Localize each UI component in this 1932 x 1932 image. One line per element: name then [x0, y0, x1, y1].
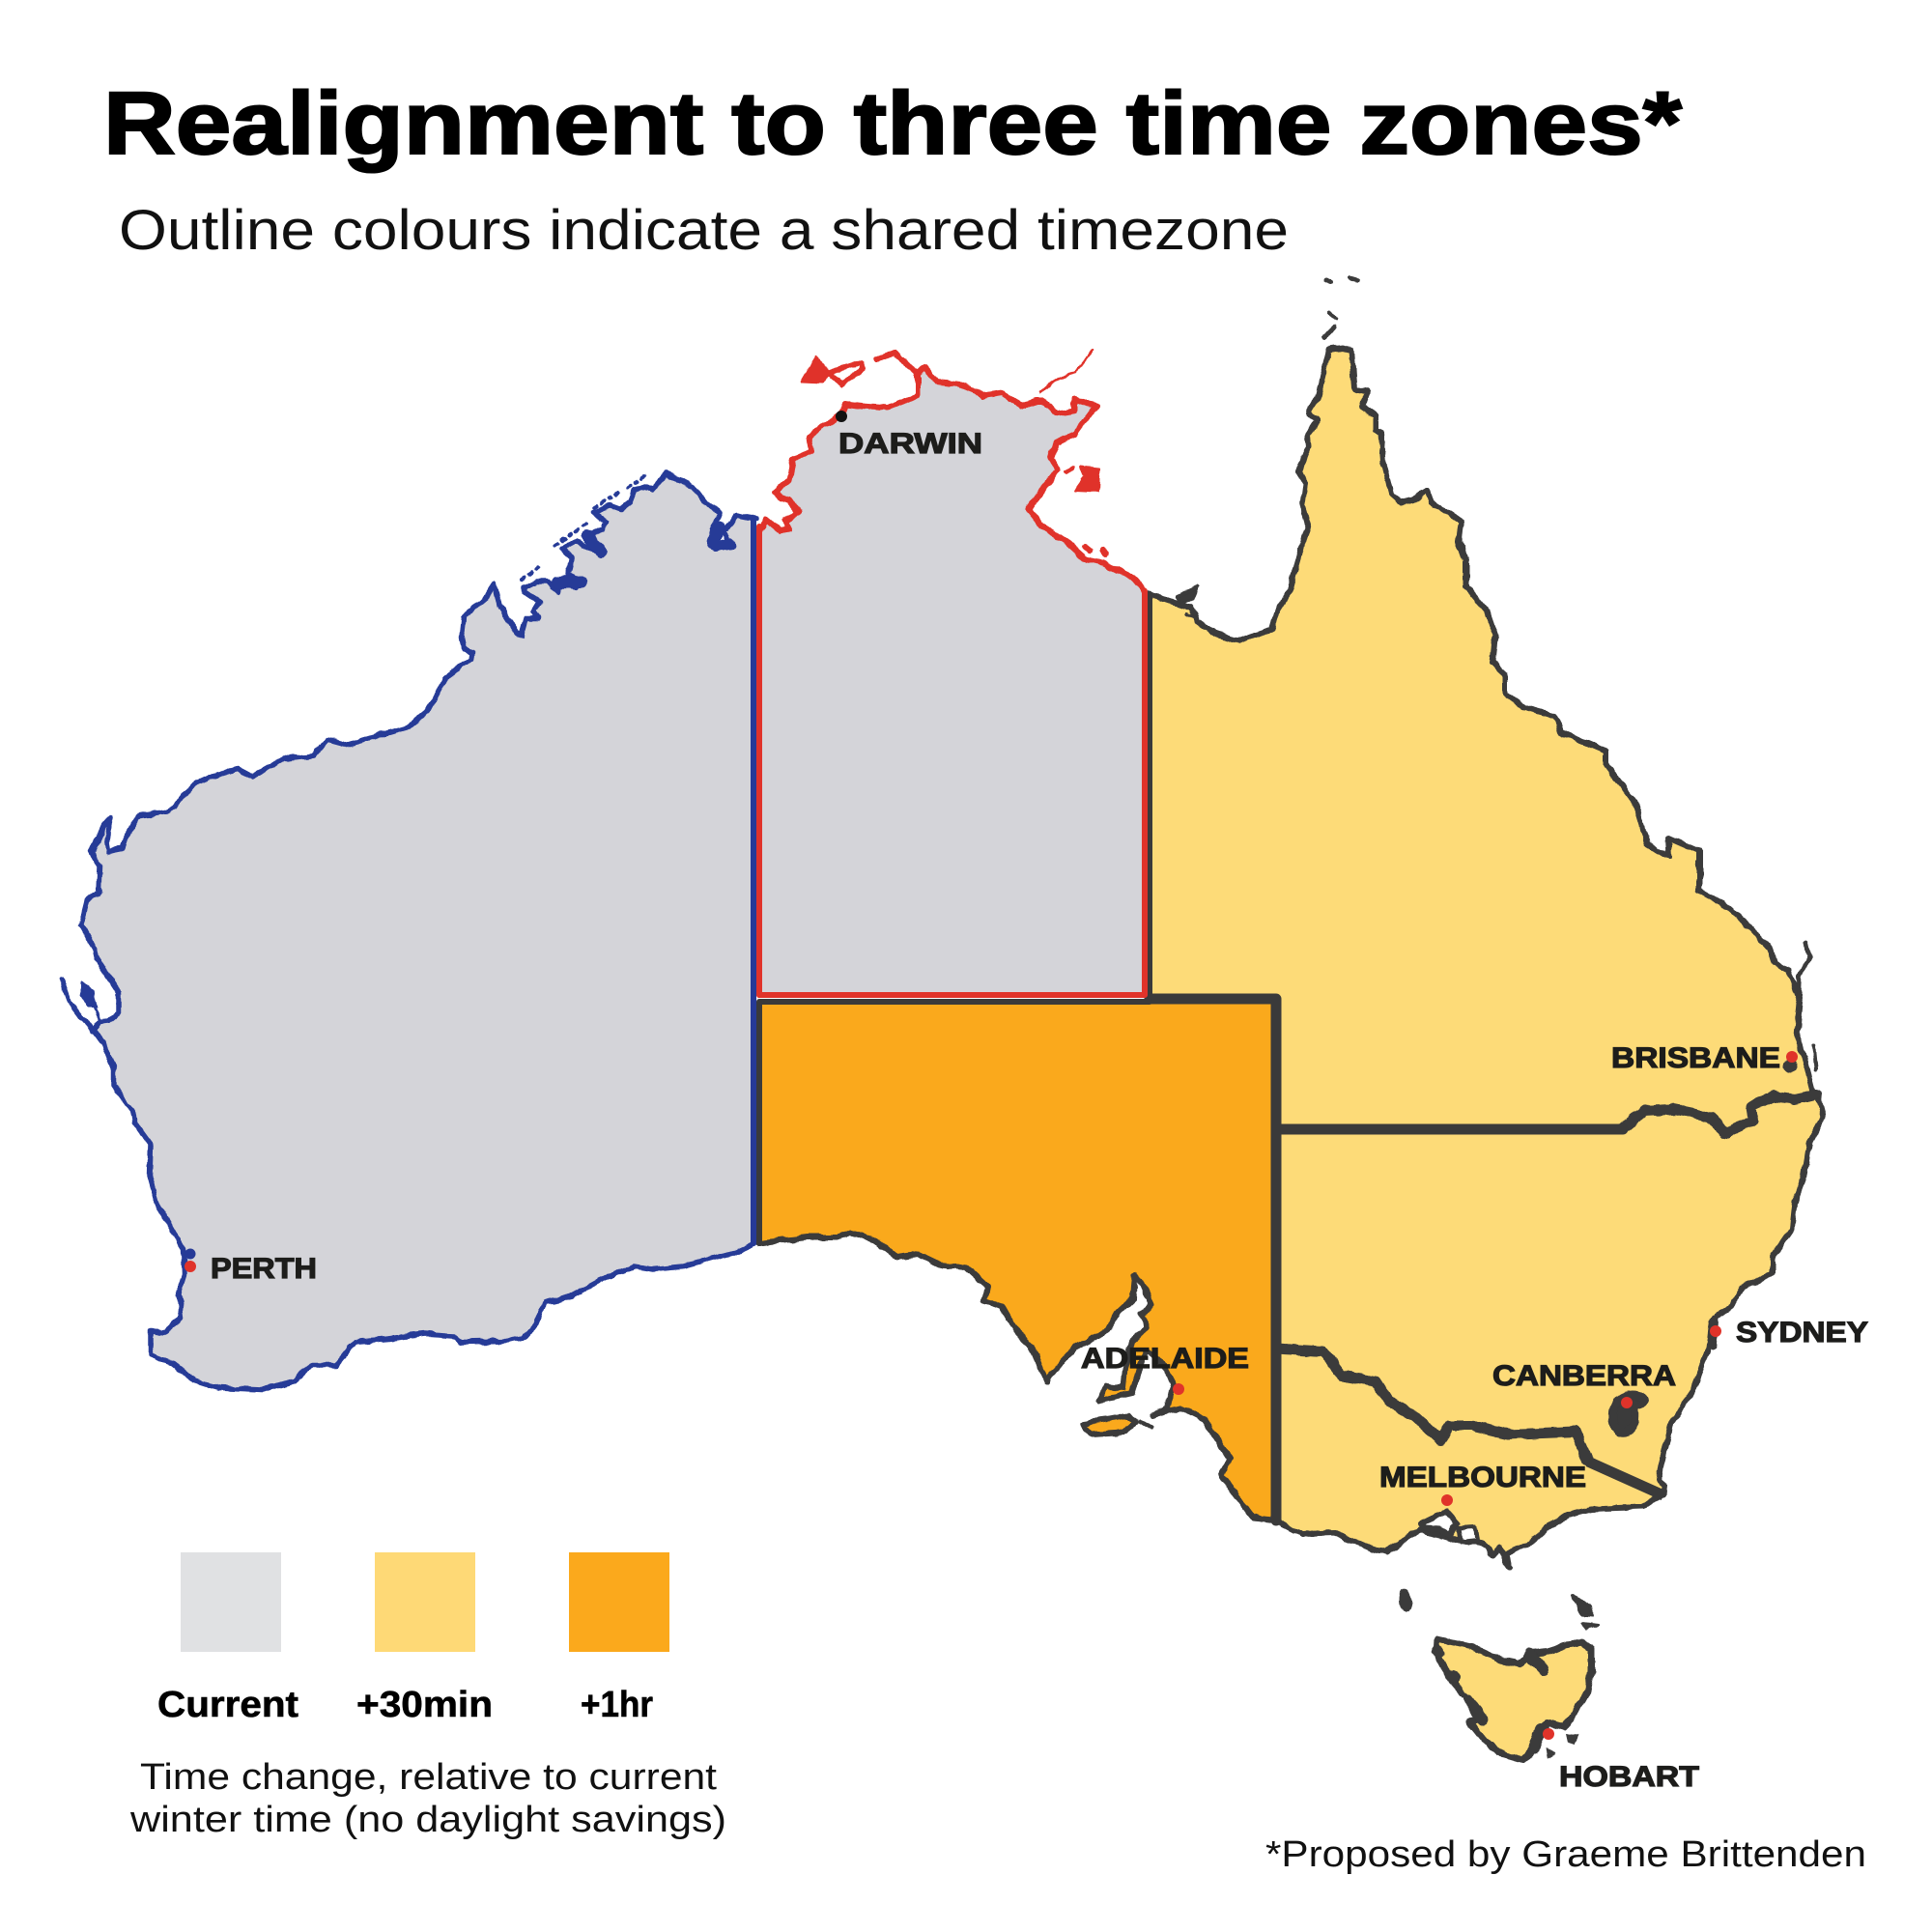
city markers [185, 411, 1798, 1740]
island: Flinders Island [1573, 1597, 1592, 1616]
island: King Island [1400, 1589, 1411, 1612]
border: NT east dark line [1147, 594, 1152, 999]
swatch: current [181, 1552, 281, 1652]
island: Pellew group [1067, 468, 1107, 555]
island: Groote Eylandt [1075, 467, 1099, 491]
marker: Darwin [836, 411, 847, 422]
label: Melbourne: MELBOURNE [1379, 1462, 1586, 1493]
label: Sydney: SYDNEY [1736, 1317, 1868, 1349]
label: Adelaide: ADELAIDE [1081, 1343, 1249, 1375]
fill: South Australia [759, 1002, 1276, 1520]
marker: Canberra [1621, 1397, 1633, 1408]
bay: Port Phillip [1420, 1511, 1458, 1535]
island: Cape Barren Island [1581, 1623, 1599, 1629]
legend caption: winter time (no daylight savings) [129, 1800, 726, 1840]
marker: Brisbane [1786, 1051, 1798, 1063]
marker: Perth [185, 1261, 196, 1272]
subtitle: Outline colours indicate a shared timezone [119, 199, 1289, 262]
legend label: current: Current [157, 1685, 298, 1725]
legend label: +1hr: +1hr [581, 1685, 653, 1725]
island: Fraser Island [1799, 944, 1809, 995]
border: SA west and north [759, 1002, 1150, 1241]
island: Melville east [826, 362, 863, 384]
border: eastern SA and QLD straight line [1150, 999, 1276, 1520]
border: NT south and east in red [759, 591, 1145, 995]
border: WA east [751, 519, 756, 1243]
label: Darwin: DARWIN [838, 428, 982, 460]
legend [129, 1552, 726, 1840]
outline: Dirk Hartog Island [61, 979, 92, 1031]
border: Queensland / New South Wales wiggly river section [1623, 1094, 1816, 1133]
island: Wessel Islands [1040, 351, 1092, 393]
specks: Kimberley offshore islands [522, 473, 649, 580]
swatch: +30min [375, 1552, 475, 1652]
border: Victoria east straight line [1588, 1462, 1663, 1495]
islet east of Kangaroo Island [1140, 1423, 1151, 1427]
marker: Melbourne [1441, 1494, 1453, 1506]
island: Moreton Bay islands [1814, 1046, 1816, 1069]
label: Canberra: CANBERRA [1492, 1360, 1676, 1392]
region: Tasmania [1436, 1639, 1591, 1760]
city labels [211, 428, 1868, 1793]
label: Hobart: HOBART [1559, 1761, 1699, 1793]
coast: Northern Territory [759, 367, 1145, 591]
coast: Queensland, New South Wales, Victoria [1150, 348, 1823, 1567]
outline: Peron Peninsula [82, 982, 101, 1022]
marker: Sydney [1710, 1325, 1721, 1337]
bay: Western Port [1459, 1527, 1477, 1542]
island: Bruny [1546, 1734, 1579, 1758]
border: ACT [1613, 1395, 1643, 1433]
border: New South Wales / Victoria [1276, 1349, 1588, 1462]
swatch: +1hr [569, 1552, 669, 1652]
title: Realignment to three time zones* [103, 74, 1682, 173]
outline: Kimberley inlets thick ends [557, 526, 729, 582]
region: eastern states [1150, 278, 1823, 1760]
legend caption [129, 1757, 726, 1840]
fill: Queensland, New South Wales, Victoria [1150, 348, 1823, 1567]
region: Western Australia [61, 473, 755, 1390]
island: Melville west [802, 357, 829, 383]
marker: Hobart [1543, 1728, 1554, 1740]
border: NT west in red [756, 526, 762, 995]
legend label: +30min: +30min [356, 1685, 493, 1725]
Tasmania thick inlets [1436, 1650, 1543, 1748]
map of Australia [61, 278, 1823, 1760]
coast: South Australia [759, 1233, 1276, 1520]
credit note: *Proposed by Graeme Brittenden [1265, 1834, 1866, 1875]
coast: Sydney harbour thick section [1713, 1321, 1715, 1345]
island: Torres Strait [1323, 278, 1356, 338]
border: Queensland / New South Wales straight section [1276, 1124, 1623, 1134]
island: Kangaroo Island [1084, 1415, 1135, 1435]
region: South Australia [759, 1002, 1276, 1520]
marker: Perth blue dot [185, 1248, 195, 1260]
label: Brisbane: BRISBANE [1611, 1042, 1780, 1074]
marker: Adelaide [1173, 1383, 1184, 1395]
bay: Wellesley islands [1177, 587, 1198, 618]
legend caption: Time change, relative to current [140, 1757, 717, 1798]
label: Perth: PERTH [211, 1253, 317, 1285]
fill: Northern Territory [759, 367, 1145, 995]
bay: Moreton Bay blob [1783, 1060, 1797, 1073]
region: Northern Territory [759, 351, 1145, 995]
island: Cobourg Peninsula [877, 353, 918, 372]
